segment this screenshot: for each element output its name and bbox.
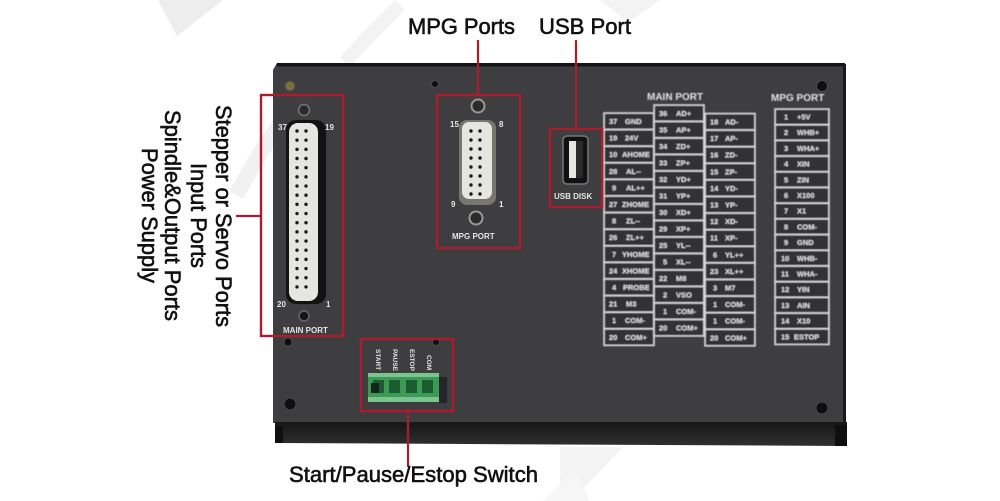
mpg port column: WHA+ [797,144,820,153]
start pause estop terminal: ESTOP [408,349,415,372]
main port middle column: 22 [659,274,667,283]
main port right column: M7 [725,284,735,292]
main port left column: XHOME [622,266,650,275]
main port middle column: ZP+ [676,158,691,168]
main port middle column: 35 [659,126,667,134]
main port left column: 7 [612,250,616,259]
mpg port column: 15 [781,332,789,341]
main port right column: 16 [710,151,718,160]
main port left column: 19 [609,134,617,143]
main port connector: MAIN PORT [283,326,328,335]
main port right column: 1 [713,300,717,309]
mpg port column [775,109,829,344]
mpg port column: X1 [797,207,806,216]
main port right column: 20 [710,333,718,342]
main port connector: 20 [277,300,286,309]
main port left column: 27 [609,200,617,209]
label: usb port: USB Port [539,14,631,39]
main port left column: ZL++ [626,233,645,242]
main port right column: 6 [713,250,717,259]
watermark [158,0,660,501]
mpg port connector: 8 [499,120,504,129]
main port connector: 1 [326,300,331,309]
start pause estop terminal: COM [425,355,432,370]
label: main port functions: Input Ports [186,163,211,268]
connector line: switch [407,411,409,467]
main port right column: AD- [725,118,739,126]
main port middle column: 30 [659,208,667,217]
main port right column: COM- [725,300,745,309]
mpg port connector [450,100,504,241]
main port left column: PROBE [623,283,650,292]
main port middle column: M8 [676,274,686,283]
main port middle column: XL-- [676,258,691,266]
mpg port column: X100 [797,191,815,200]
main port middle column: 29 [659,224,667,234]
main port right column: COM+ [725,333,747,342]
main port left column: GND [625,117,642,126]
main port right column: 14 [710,184,719,193]
mpg port connector: MPG PORT [452,232,495,241]
main port middle column: 2 [663,290,667,300]
mpg port column: 9 [784,238,788,247]
mpg port column: 2 [784,128,788,137]
main port left column: 28 [609,167,617,176]
main port right column: 13 [710,200,718,210]
main port middle column: 32 [659,175,667,184]
mpg port column: 13 [781,301,789,310]
usb port [554,136,592,201]
connector line: main port [236,215,261,217]
main port middle column: COM+ [676,324,698,332]
main port right column: XP- [725,234,738,243]
main port middle column: AP+ [676,126,691,134]
label: switch: Start/Pause/Estop Switch [289,462,538,487]
mpg port column: YIN [797,285,810,294]
main port connector: 37 [278,123,287,132]
mpg port column: WHB- [797,254,818,263]
mpg port heading: MPG PORT [771,93,824,104]
main port left column: COM- [625,316,645,325]
main port right column: 17 [710,134,718,143]
main port left column: 8 [612,217,616,226]
main port left column: 4 [612,283,617,292]
mpg port pin table [771,93,829,344]
main port middle column: YD+ [676,175,691,184]
highlight box: mpg port [437,95,520,248]
main port left column: 1 [612,316,616,325]
main port left column: M3 [626,300,636,309]
main port right column: YD- [725,184,738,193]
main port left column: AHOME [622,150,650,159]
label: main port functions: Stepper or Servo Ports [211,105,236,327]
highlight box: start pause estop [361,339,453,411]
mpg port column: 5 [784,175,788,184]
label: main port functions: Spindle&Output Ports [160,110,185,321]
main port heading: MAIN PORT [647,92,703,103]
usb port: USB DISK [554,192,592,201]
main port right column: COM- [725,317,745,326]
main port right column [705,114,755,346]
mpg port column: WHB+ [797,128,820,137]
main port left column: 9 [612,183,616,192]
mpg port column: XIN [797,160,810,169]
label: mpg ports: MPG Ports [408,14,515,39]
mpg port column: 10 [781,254,789,263]
main port middle column: 25 [659,241,667,250]
main port left column: 24 [609,266,618,275]
main port middle column: 33 [659,158,667,168]
mpg port column: +5V [797,112,811,122]
main port right column: 1 [713,317,717,326]
main port middle column: 34 [659,142,668,151]
mpg port column: 12 [781,285,789,294]
mpg port column: GND [797,238,814,247]
mpg port column: ESTOP [794,332,819,341]
main port left column: AL-- [626,167,641,176]
main port right column: 12 [710,217,718,226]
mpg port connector: 1 [499,200,504,209]
main port right column: ZP- [725,167,738,176]
start pause estop terminal: START [374,349,381,370]
main port middle column: ZD+ [676,142,691,151]
main port right column: 18 [710,118,718,126]
main port left column [604,113,654,345]
connector line: mpg port [477,40,479,95]
main port left column: 26 [609,233,617,242]
main port connector: 19 [325,123,334,132]
main port left column: ZHOME [622,200,649,209]
mpg port column: 3 [784,144,788,153]
main port right column: AP- [725,134,738,143]
main port pin table [604,92,755,346]
main port middle column: XP+ [676,224,691,234]
mpg port column: AIN [797,301,810,310]
main port middle column: COM- [676,307,696,316]
mpg port column: COM- [797,222,817,231]
main port middle column: 5 [663,258,667,266]
mpg port column: 11 [781,270,789,278]
start pause estop terminal [368,349,447,403]
main port middle column: 31 [659,192,667,200]
main port right column: XD- [725,217,738,226]
controller panel [273,63,847,446]
mpg port column: 4 [784,160,789,169]
mpg port column: X10 [797,317,810,326]
main port connector [277,104,334,335]
main port left column: ZL-- [626,217,641,226]
label: main port functions [137,105,236,327]
highlight box: usb port [550,129,602,207]
main port right column: YP- [725,200,738,210]
main port right column: XL++ [725,267,744,276]
main port right column: 3 [713,284,717,292]
main port middle column: YP+ [676,192,691,200]
main port middle column: VSO [676,290,692,300]
main port left column: 24V [625,134,638,143]
mpg port column: 7 [784,207,788,216]
main port right column: YL++ [725,250,744,259]
main port middle column: 1 [663,307,667,316]
main port middle column: XD+ [676,208,691,217]
main port left column: 37 [609,117,617,126]
main port left column: 20 [609,333,617,342]
main port right column: 11 [710,234,718,243]
mpg port connector: 9 [451,200,456,209]
main port left column: COM+ [625,333,647,342]
mpg port column: ZIN [797,175,809,184]
mpg port column: 6 [784,191,788,200]
main port middle column: YL-- [676,241,691,250]
mpg port column: 8 [784,222,788,231]
main port left column: 21 [609,300,617,309]
start pause estop terminal: PAUSE [391,349,398,372]
main port middle column: AD+ [676,109,692,118]
label: main port functions: Power Supply [137,148,162,283]
main port middle column [654,105,704,336]
main port right column: ZD- [725,151,738,160]
mpg port column: 14 [781,317,790,326]
main port right column: 15 [710,167,718,176]
main port left column: YHOME [622,250,650,259]
main port right column: 23 [710,267,718,276]
mpg port connector: 15 [450,120,459,129]
mpg port column: 1 [784,112,788,122]
main port middle column: 20 [659,324,667,332]
screws [284,80,828,414]
mpg port column: WHA- [797,270,818,278]
main port left column: 10 [609,150,617,159]
connector line: usb port [575,40,577,129]
main port middle column: 36 [659,109,667,118]
main port left column: AL++ [626,183,645,192]
highlight box: main port [261,95,343,336]
